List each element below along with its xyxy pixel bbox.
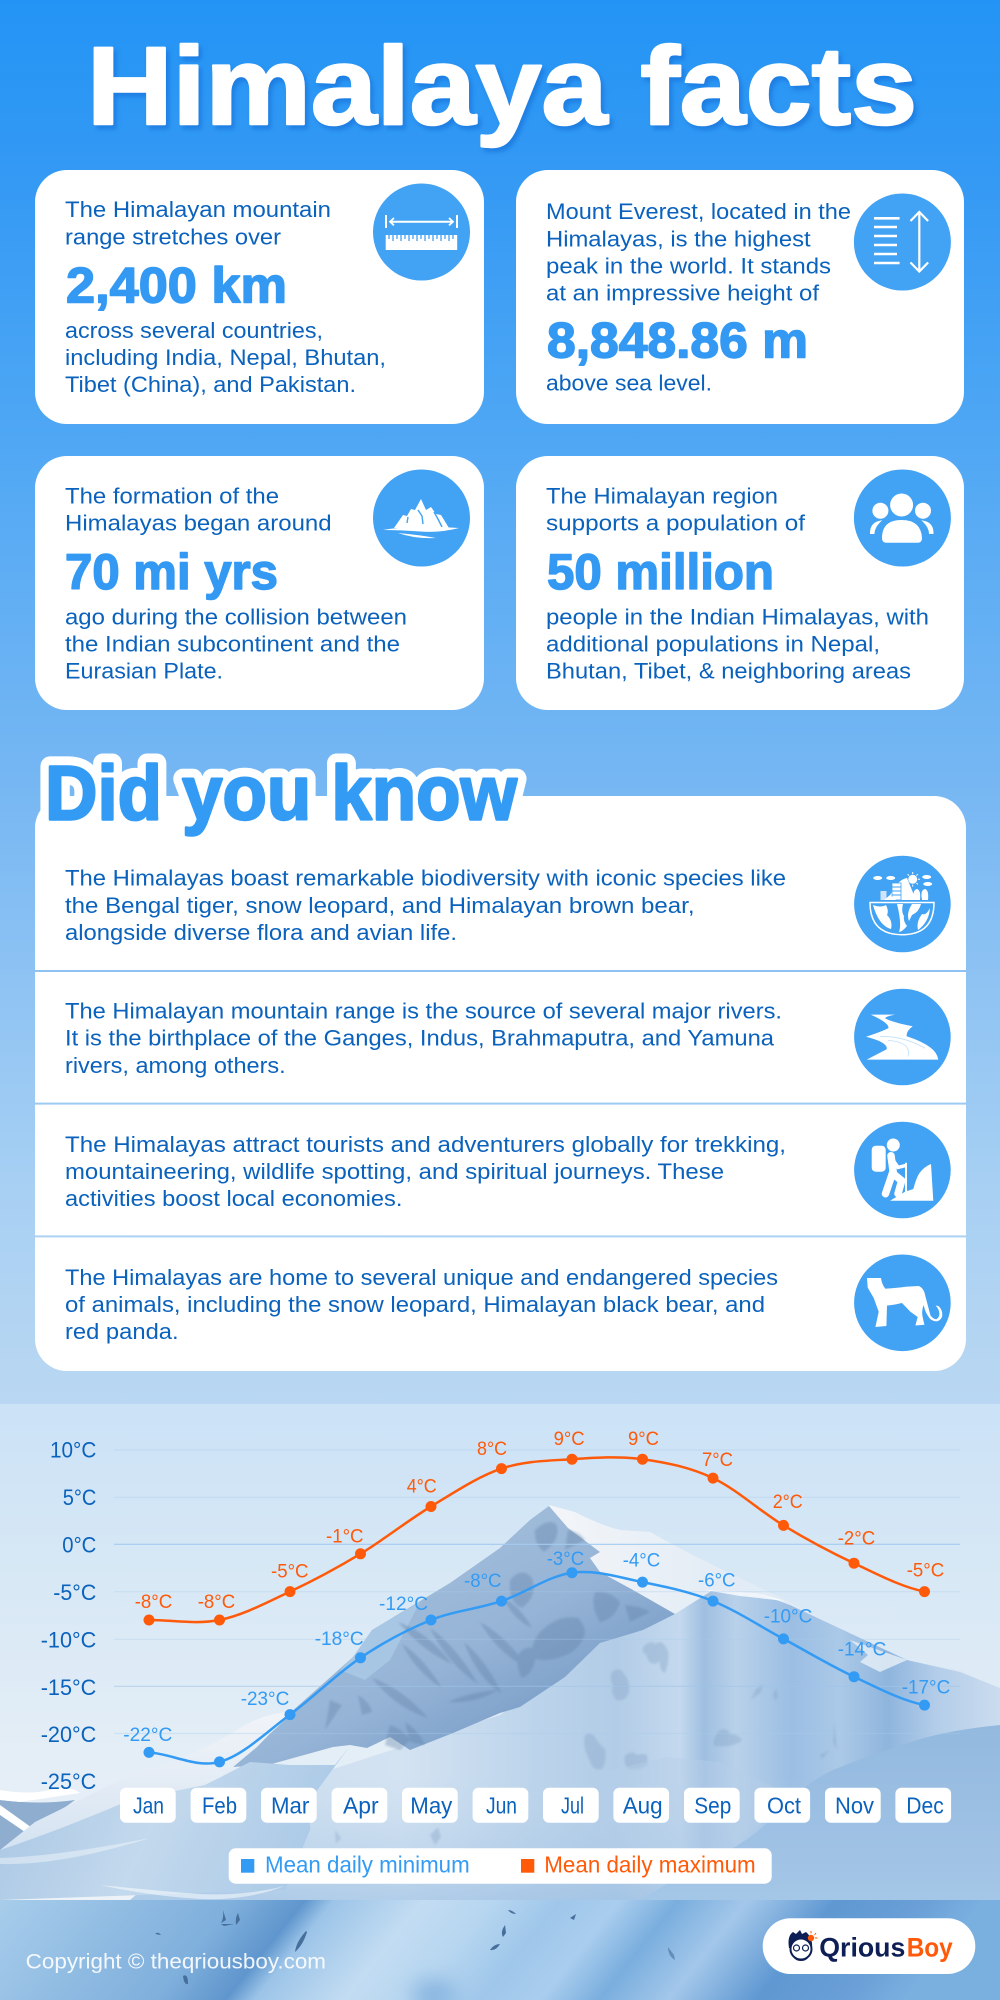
logo: QriousBoy: Qrious — [819, 1933, 905, 1963]
y axis labels — [41, 1438, 96, 1794]
month labels: Apr — [343, 1792, 379, 1818]
text: biodiversity — [65, 866, 786, 945]
text: range stretch — [65, 197, 386, 397]
panel: formation of the Himalayas — [35, 456, 484, 710]
y axis labels: -25°C — [41, 1769, 96, 1794]
heading: did you know: Did you know — [45, 750, 518, 836]
text: range stretch: Tibet (China), and Pakistan. — [65, 372, 356, 397]
text: tourism: activities boost local economies. — [65, 1186, 402, 1211]
month labels: Dec — [906, 1792, 944, 1818]
series: mean daily minimum: -18°C — [315, 1628, 364, 1650]
panel: mountain range length — [35, 170, 484, 424]
text: endangered species: red panda. — [65, 1319, 179, 1344]
series: mean daily maximum: -5°C — [907, 1560, 944, 1582]
series: mean daily minimum: -17°C — [902, 1677, 950, 1699]
y axis labels: 0°C — [62, 1533, 96, 1558]
main rocky peak — [233, 1506, 675, 1767]
series: mean daily maximum: 9°C — [554, 1428, 585, 1450]
text: endangered species — [65, 1265, 778, 1344]
text: Everest height: 8,848.86 m — [547, 312, 808, 368]
y axis labels: 10°C — [50, 1438, 96, 1462]
month labels: Feb — [202, 1792, 237, 1818]
series: mean daily maximum: -1°C — [326, 1526, 364, 1548]
text: range stretch: The Himalayan mountain — [65, 197, 331, 222]
icon: ruler with span arrow — [373, 184, 470, 280]
chart: monthly temperatures — [41, 1428, 960, 1884]
month labels: Aug — [623, 1792, 663, 1818]
series: mean daily maximum: 8°C — [477, 1438, 507, 1460]
rock texture — [325, 1522, 650, 1750]
icon: river — [854, 989, 951, 1085]
month labels: Jan — [133, 1792, 164, 1818]
text: formation: the Indian subcontinent and the — [65, 632, 400, 657]
month labels: Sep — [694, 1792, 731, 1818]
text: population: Bhutan, Tibet, & neighboring areas — [546, 659, 911, 684]
panel: population — [516, 456, 964, 710]
series: mean daily minimum: -22°C — [123, 1724, 172, 1746]
heading: did you know: Did you know — [45, 750, 518, 836]
icon: height measure — [854, 194, 951, 290]
series: mean daily maximum: 2°C — [773, 1491, 803, 1513]
text: formation: 70 mi yrs — [65, 544, 278, 600]
series: mean daily minimum: -14°C — [838, 1639, 886, 1661]
text: population: additional populations in Nepal, — [546, 632, 880, 657]
left far mountain — [0, 1800, 75, 1850]
snow ridge behind peak — [549, 1505, 1000, 1800]
text: Everest height — [546, 199, 851, 396]
month labels: May — [410, 1792, 453, 1818]
series: mean daily minimum: -10°C — [764, 1606, 812, 1628]
month labels: Jul — [561, 1792, 584, 1818]
illustration: snowy mountain backdrop — [0, 1404, 1000, 2000]
series: mean daily minimum — [123, 1548, 950, 1767]
text: range stretch: range stretches over — [65, 224, 282, 250]
series: mean daily maximum: -8°C — [198, 1591, 235, 1613]
y axis labels: -5°C — [53, 1580, 96, 1605]
series: mean daily maximum: 4°C — [407, 1476, 437, 1498]
text: formation: The formation of the — [65, 483, 279, 508]
series: mean daily minimum: -8°C — [464, 1570, 502, 1592]
logo: QriousBoy: Boy — [907, 1933, 953, 1963]
scattered rocks on front mountain — [80, 1642, 837, 1881]
series: mean daily minimum: -4°C — [623, 1550, 660, 1572]
series: mean daily maximum: 9°C — [628, 1428, 659, 1450]
icon: hiker — [854, 1122, 951, 1218]
month labels: Jun — [486, 1792, 517, 1818]
logo: QriousBoy — [763, 1918, 975, 1974]
text: endangered species: of animals, including the snow leopard, Himalayan black bear, and — [65, 1292, 765, 1317]
text: rivers: The Himalayan mountain range is the source of several major rivers. — [65, 999, 782, 1024]
month labels — [120, 1788, 951, 1823]
front light mountain — [130, 1590, 1000, 1900]
month labels: Nov — [835, 1792, 874, 1818]
month labels: Oct — [767, 1792, 802, 1818]
text: Everest height: above sea level. — [546, 371, 712, 396]
icon: mountain peaks — [373, 470, 470, 566]
series: mean daily minimum: -6°C — [698, 1570, 736, 1592]
legend — [229, 1848, 772, 1884]
series: mean daily maximum: -8°C — [135, 1591, 172, 1613]
text: population: 50 million — [547, 544, 774, 600]
icon: biodiversity globe — [854, 856, 951, 952]
text: population: supports a population of — [546, 511, 806, 536]
text: formation: Himalayas began around — [65, 511, 332, 536]
y axis labels: 5°C — [63, 1485, 96, 1510]
panel: did you know list — [35, 796, 966, 1371]
text: tourism — [65, 1132, 786, 1211]
series: mean daily maximum: -5°C — [271, 1561, 308, 1583]
copyright: Copyright © theqriousboy.com — [26, 1950, 326, 1974]
text: formation: Eurasian Plate. — [65, 659, 223, 684]
left blue hill — [0, 1746, 350, 1900]
text: rivers — [65, 999, 782, 1078]
text: rivers: It is the birthplace of the Ganges, Indus, Brahmaputra, and Yamuna — [65, 1026, 775, 1051]
text: endangered species: The Himalayas are home to several unique and endangered species — [65, 1265, 778, 1290]
grid lines — [114, 1450, 960, 1734]
text: Everest height: Himalayas, is the highest — [546, 227, 811, 252]
panel: Mount Everest height — [516, 170, 964, 424]
text: formation: ago during the collision between — [65, 604, 407, 629]
text: population: people in the Indian Himalayas, with — [546, 604, 929, 629]
foreground strip — [0, 1900, 1000, 2000]
dark leaf marks — [155, 1910, 675, 1984]
text: range stretch: including India, Nepal, Bhutan, — [65, 345, 386, 370]
series: mean daily maximum — [135, 1428, 944, 1626]
icon: boy face with lightbulb — [788, 1930, 818, 1961]
text: range stretch: 2,400 km — [66, 258, 287, 314]
text: tourism: The Himalayas attract tourists and adventurers globally for trekking, — [65, 1132, 786, 1157]
text: tourism: mountaineering, wildlife spotting, and spiritual journeys. These — [65, 1159, 724, 1184]
text: biodiversity: the Bengal tiger, snow leopard, and Himalayan brown bear, — [65, 893, 695, 918]
title: Himalaya facts — [87, 25, 917, 148]
series: mean daily minimum: -3°C — [547, 1548, 584, 1570]
left pale hill — [0, 1712, 292, 1900]
month labels: Mar — [271, 1792, 310, 1818]
text: Everest height: at an impressive height of — [546, 281, 820, 306]
series: mean daily minimum: -12°C — [379, 1593, 428, 1615]
text: population — [546, 483, 929, 684]
legend: Mean daily minimum — [265, 1851, 470, 1877]
text: formation — [65, 483, 407, 684]
text: population: The Himalayan region — [546, 483, 778, 508]
text: range stretch: across several countries, — [65, 318, 323, 343]
text: Everest height: peak in the world. It stands — [546, 254, 831, 279]
series: mean daily maximum: -2°C — [838, 1528, 875, 1550]
icon: snow leopard — [854, 1254, 951, 1351]
text: biodiversity: The Himalayas boast remarkable biodiversity with iconic species like — [65, 866, 786, 891]
series: mean daily maximum: 7°C — [702, 1449, 733, 1471]
right foreground hill — [640, 1725, 1000, 1900]
text: rivers: rivers, among others. — [65, 1053, 286, 1078]
y axis labels: -10°C — [41, 1627, 96, 1652]
text: Everest height: Mount Everest, located in the — [546, 199, 851, 224]
text: biodiversity: alongside diverse flora and avian life. — [65, 920, 457, 945]
legend: Mean daily maximum — [544, 1851, 756, 1877]
y axis labels: -20°C — [41, 1722, 96, 1747]
y axis labels: -15°C — [41, 1675, 96, 1700]
icon: people group — [854, 470, 951, 566]
series: mean daily minimum: -23°C — [241, 1688, 289, 1710]
